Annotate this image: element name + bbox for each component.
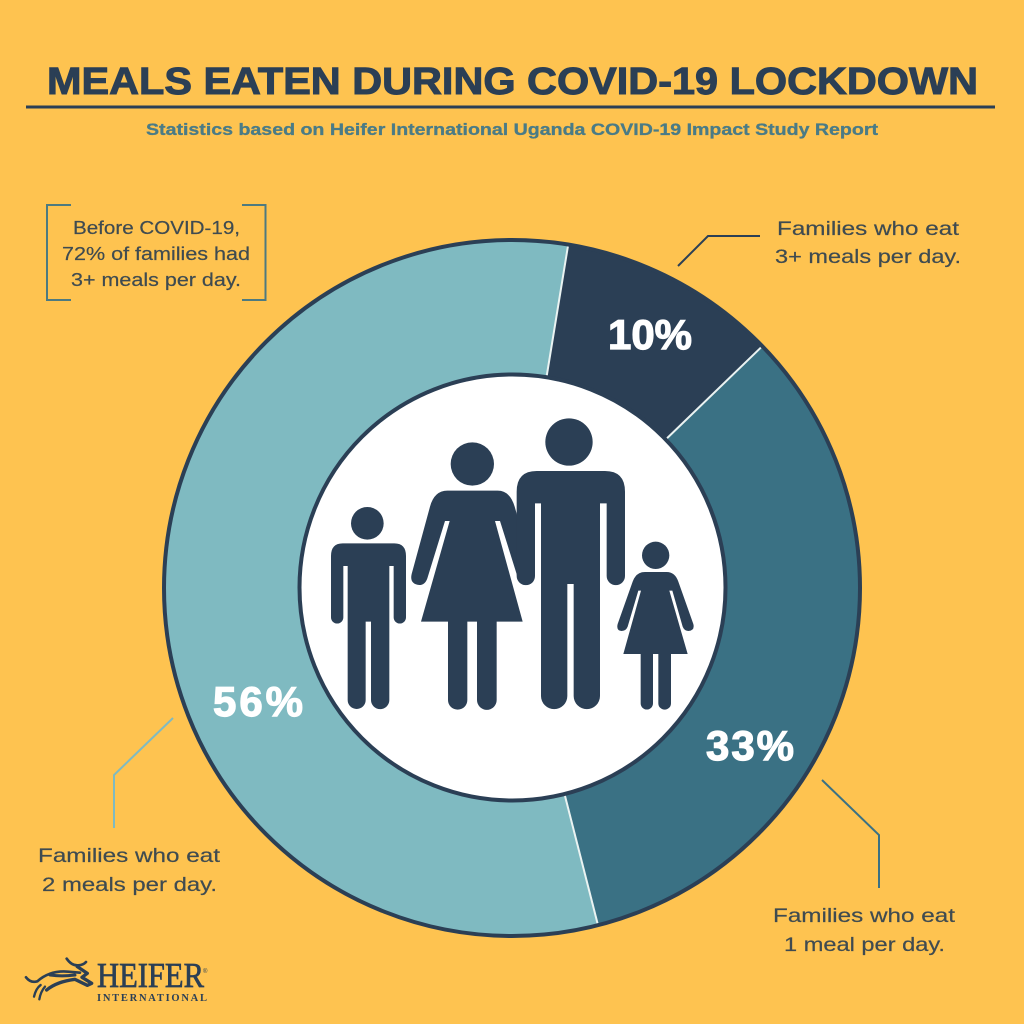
callout: 3+ meals: Families who eat — [777, 218, 960, 240]
callout: 2 meals — [38, 718, 221, 896]
callout: 3+ meals — [678, 218, 961, 268]
logo wordmark: HEIFER — [97, 956, 205, 995]
icon: woman — [411, 442, 534, 710]
icon: boy — [331, 507, 406, 709]
callout: 2 meals: Families who eat — [38, 845, 221, 867]
logo: Heifer International: INTERNATIONAL — [97, 993, 207, 1004]
callout: before COVID-19 — [47, 205, 266, 300]
slice: 33% one meal — [512, 346, 860, 925]
callout: 1 meal: 1 meal per day. — [784, 934, 945, 956]
callout: 3+ meals: 3+ meals per day. — [775, 246, 961, 268]
slice: 56% two meals — [164, 240, 598, 936]
value: 10%: 10% — [608, 311, 692, 358]
value: 56%: 56% — [213, 678, 303, 725]
callout: before COVID-19: 3+ meals per day. — [71, 270, 241, 290]
subtitle: Statistics based on Heifer International Uganda COVID-19 Impact Study Report — [146, 121, 879, 139]
icon: family — [331, 418, 694, 710]
callout: 2 meals: 2 meals per day. — [42, 874, 217, 896]
callout: before COVID-19: 72% of families had — [62, 244, 250, 264]
icon: leaping bull — [26, 959, 92, 999]
logo: Heifer International: ® — [203, 968, 208, 975]
value: 33%: 33% — [706, 722, 794, 769]
slice: 10% three meals — [512, 245, 762, 588]
donut chart — [164, 240, 860, 936]
callout: 1 meal: Families who eat — [773, 905, 956, 927]
title: MEALS EATEN DURING COVID-19 LOCKDOWN — [47, 61, 978, 103]
logo: Heifer International — [26, 956, 208, 1004]
icon: girl — [617, 542, 694, 710]
icon: man — [517, 418, 625, 709]
callout: 1 meal — [773, 780, 956, 956]
callout: before COVID-19: Before COVID-19, — [73, 218, 240, 238]
center circle — [300, 374, 726, 800]
